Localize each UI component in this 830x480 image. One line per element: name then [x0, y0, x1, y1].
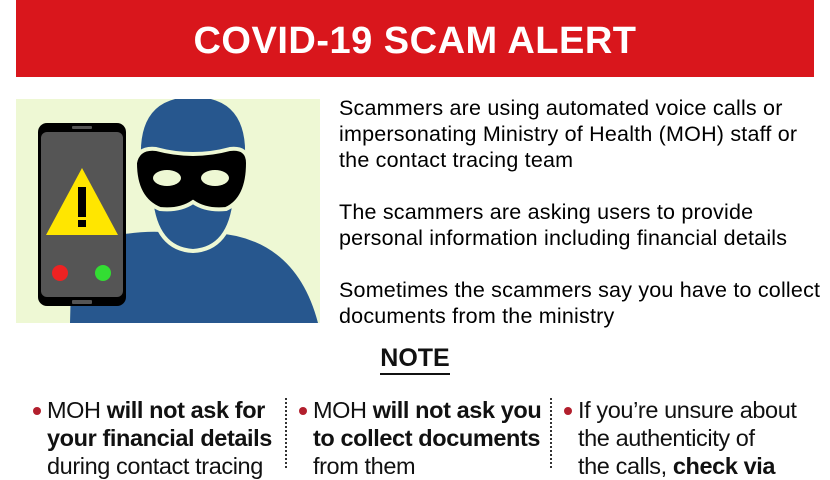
phone: [38, 123, 126, 306]
column 2: from them: [313, 453, 415, 479]
column 2: MOH will not ask you: [313, 397, 541, 423]
column 3: [564, 397, 797, 479]
illustration: scammer with phone: [16, 99, 320, 323]
text block: scam description: documents from the ministry: [339, 304, 614, 328]
text block: scam description: impersonating Ministry of Health (MOH) staff or: [339, 122, 797, 146]
heading: note: NOTE: [380, 344, 450, 372]
text block: scam description: Sometimes the scammers say you have to collect: [339, 278, 820, 302]
column 1: [33, 397, 272, 479]
body and head: [70, 97, 318, 323]
title banner: [16, 0, 814, 77]
column 2: to collect documents: [313, 425, 540, 451]
text block: scam description: personal information including financial details: [339, 226, 787, 250]
column 3: If you’re unsure about: [578, 397, 797, 423]
column 1: your financial details: [47, 425, 272, 451]
text block: scam description: the contact tracing team: [339, 148, 573, 172]
text block: scam description: Scammers are using automated voice calls or: [339, 96, 783, 120]
mask: [135, 149, 248, 209]
column 3: the authenticity of: [578, 425, 755, 451]
text block: scam description: [339, 96, 820, 328]
column 1: during contact tracing: [47, 453, 263, 479]
text block: scam description: The scammers are asking users to provide: [339, 200, 753, 224]
title banner: COVID-19 SCAM ALERT: [193, 20, 636, 62]
column 3: the calls, check via: [578, 453, 775, 479]
column 1: MOH will not ask for: [47, 397, 265, 423]
column 2: [299, 397, 541, 479]
